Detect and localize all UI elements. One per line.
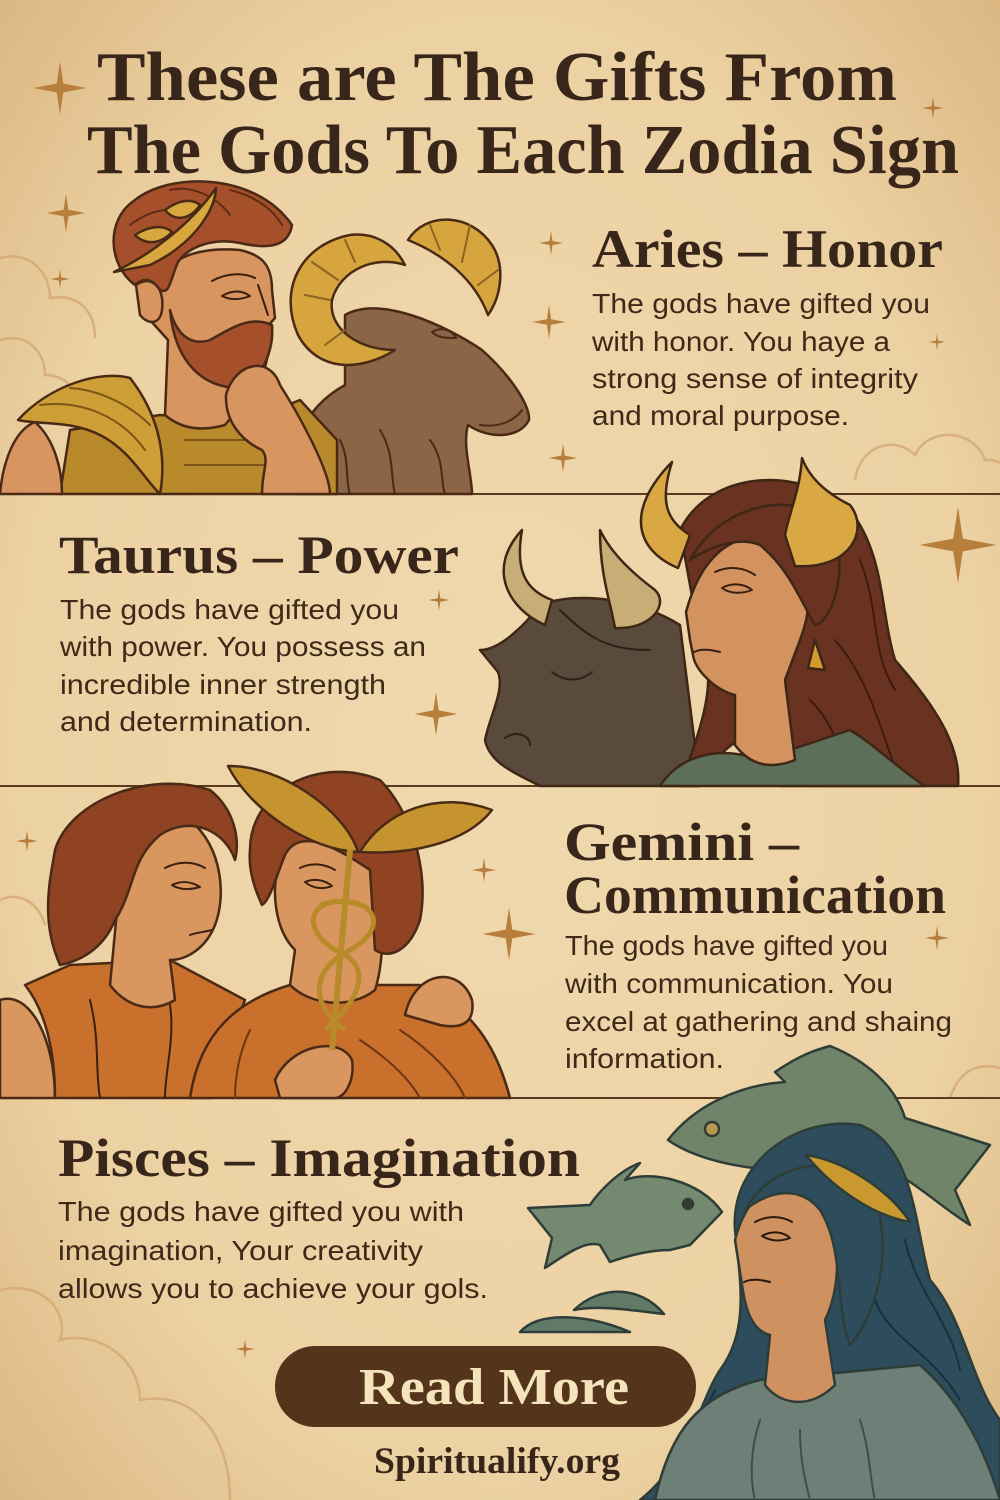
text: Taurus xyxy=(59,594,426,737)
text: Gemini: The gods have gifted you xyxy=(565,930,888,961)
woman hair back xyxy=(680,480,958,786)
ram eye and mouth xyxy=(340,329,522,494)
right twin neck and face xyxy=(275,830,382,1003)
illustration: Aries man and ram xyxy=(0,181,529,494)
man shoulder armor xyxy=(18,376,162,494)
laurel xyxy=(114,188,216,272)
illustration: Gemini twins xyxy=(0,766,510,1098)
illustration: Pisces woman and fish xyxy=(520,1046,1000,1500)
text: Pisces: The gods have gifted you with xyxy=(58,1196,464,1227)
left twin hair xyxy=(48,784,237,965)
woman hair strands xyxy=(810,560,900,786)
heading: Aries: Aries – Honor xyxy=(592,219,943,279)
text: Taurus: with power. You possess an xyxy=(59,631,426,662)
button: Read More: Read More xyxy=(359,1359,629,1416)
left twin features xyxy=(90,863,212,1098)
bull xyxy=(480,598,700,786)
woman hair back xyxy=(640,1124,1000,1500)
right twin hair xyxy=(250,772,423,954)
right twin eye xyxy=(300,864,335,888)
man eye and brow xyxy=(212,274,268,315)
heading: Gemini xyxy=(564,812,946,925)
woman hair front xyxy=(745,1166,883,1345)
heading: Gemini: Gemini – xyxy=(564,812,800,872)
fish top eye xyxy=(705,1122,719,1136)
text: Pisces: imagination, Your creativity xyxy=(58,1235,423,1266)
text: Aries: strong sense of integrity xyxy=(592,363,918,394)
caduceus staff xyxy=(332,850,350,1050)
ram horn xyxy=(291,235,405,365)
text: Taurus: incredible inner strength xyxy=(60,669,386,700)
horn ridges xyxy=(305,225,498,345)
dress folds xyxy=(752,1420,875,1500)
heading: Pisces: Pisces – Imagination xyxy=(58,1128,580,1188)
heading: Taurus: Taurus – Power xyxy=(59,525,459,585)
right twin robe folds xyxy=(235,1030,465,1098)
man hand and forearm xyxy=(226,366,330,494)
man beard xyxy=(170,310,272,388)
title: The Gods To Each Zodia Sign xyxy=(87,112,959,189)
heading: Gemini: Communication xyxy=(564,865,946,925)
text: Gemini xyxy=(564,930,952,1074)
man armor lines xyxy=(40,388,320,465)
button: Read More xyxy=(275,1346,696,1427)
text: Gemini: information. xyxy=(565,1043,724,1074)
right hand on shoulder xyxy=(405,977,473,1026)
left twin neck and face xyxy=(110,820,221,1007)
man ear xyxy=(136,281,162,322)
woman hair front xyxy=(690,505,839,625)
illustration: Taurus woman and bull xyxy=(480,458,958,786)
bull horns xyxy=(504,530,660,628)
text: Pisces xyxy=(58,1196,488,1304)
caduceus snakes xyxy=(313,901,373,1030)
man tunic xyxy=(60,400,337,494)
title: These are The Gifts From xyxy=(97,39,897,116)
woman face and neck xyxy=(735,1179,837,1402)
text: Aries xyxy=(591,288,930,431)
woman dress xyxy=(660,730,925,786)
fish middle eye xyxy=(683,1199,693,1209)
fish top xyxy=(668,1046,990,1225)
ram horn back xyxy=(408,220,500,315)
hand with staff xyxy=(275,1046,353,1098)
laurel xyxy=(806,1155,910,1222)
man arm left xyxy=(0,422,62,494)
site name: Spiritualify.org xyxy=(374,1441,620,1482)
man hair xyxy=(114,181,292,291)
man neck and face xyxy=(150,249,275,428)
text: Aries: with honor. You haye a xyxy=(591,326,890,357)
text: Aries: The gods have gifted you xyxy=(592,288,930,319)
text: Gemini: excel at gathering and shaing xyxy=(565,1006,952,1037)
caduceus wings xyxy=(228,766,492,853)
section dividers xyxy=(0,494,1000,1098)
text: Gemini: with communication. You xyxy=(564,968,893,999)
woman face and neck xyxy=(686,538,808,765)
bull eye and nostril xyxy=(505,610,650,745)
fish middle xyxy=(528,1163,722,1268)
left twin robe xyxy=(25,960,245,1098)
text: Aries: and moral purpose. xyxy=(592,400,849,431)
woman hair strands xyxy=(670,1240,960,1480)
man hair curls xyxy=(130,189,282,225)
right twin robe xyxy=(190,985,510,1098)
earring xyxy=(808,640,825,670)
woman horns xyxy=(641,458,858,568)
left twin arm xyxy=(0,999,55,1098)
text: Taurus: and determination. xyxy=(60,706,312,737)
text: Taurus: The gods have gifted you xyxy=(60,594,399,625)
woman eye xyxy=(744,1217,792,1282)
ram body xyxy=(294,308,529,494)
woman eye and brow xyxy=(694,568,755,652)
title xyxy=(87,39,959,189)
leaves xyxy=(520,1292,664,1332)
text: Pisces: allows you to achieve your gols. xyxy=(58,1273,488,1304)
woman dress xyxy=(655,1365,1000,1500)
